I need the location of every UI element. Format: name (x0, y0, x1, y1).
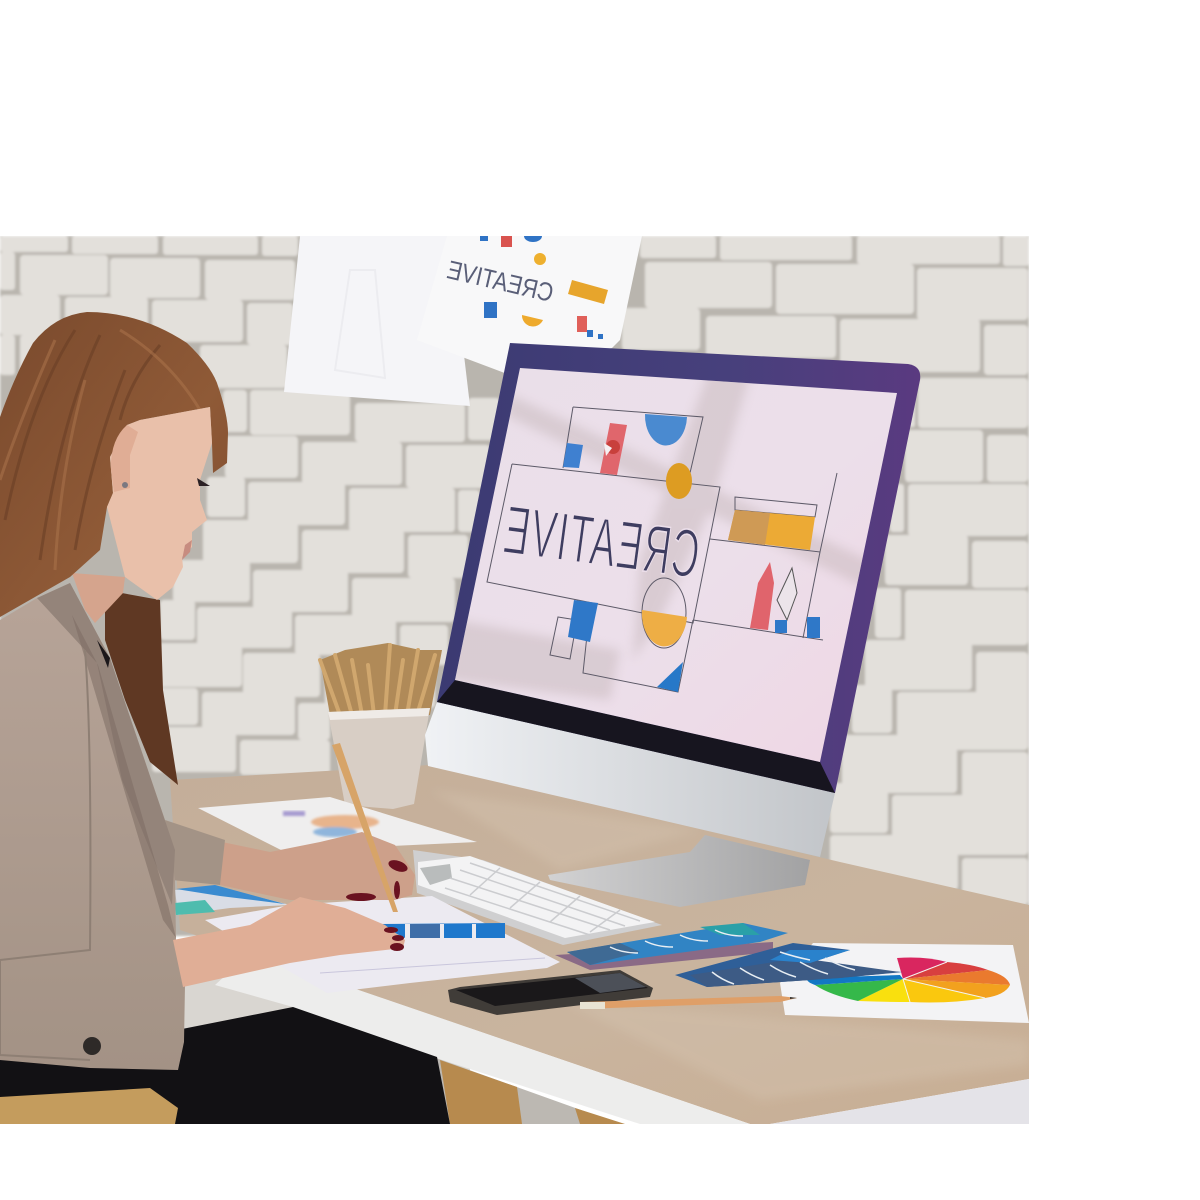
ear (111, 425, 138, 492)
sleeve upper arm (165, 820, 225, 885)
phone (448, 970, 653, 1015)
hair (0, 312, 228, 617)
keyboard (413, 850, 662, 945)
swatch fan (555, 923, 788, 970)
under desk wall and leg (170, 975, 625, 1124)
neck (72, 573, 125, 623)
photo scene (0, 236, 1029, 1124)
monitor stand (548, 835, 810, 907)
monitor (425, 343, 920, 857)
desk paper with swatches (198, 797, 477, 851)
screen (450, 360, 897, 762)
pencil in hand (332, 743, 398, 912)
color wheel (807, 958, 1010, 1002)
papers under hand (175, 885, 560, 993)
wall paper: creative poster (446, 236, 642, 373)
desk (170, 765, 1029, 1124)
upper forearm and hand (220, 832, 415, 900)
back hair strand (105, 590, 178, 785)
brick wall (0, 236, 1029, 936)
woman (0, 312, 450, 1124)
loose pencil (580, 996, 797, 1009)
pants (0, 1007, 450, 1124)
nails (346, 858, 409, 951)
dark swatches over sheet (675, 943, 903, 987)
wall paper: creative poster: CREATIVE (444, 254, 556, 308)
face (107, 407, 212, 600)
color wheel sheet (675, 943, 1029, 1023)
chair arm (0, 1088, 178, 1124)
pencil cup (320, 643, 442, 809)
wall paper: sketch sheet (284, 236, 470, 406)
lower hand (173, 897, 405, 987)
screen mirrored title: CREATIVE (500, 491, 704, 593)
jacket (0, 583, 185, 1070)
